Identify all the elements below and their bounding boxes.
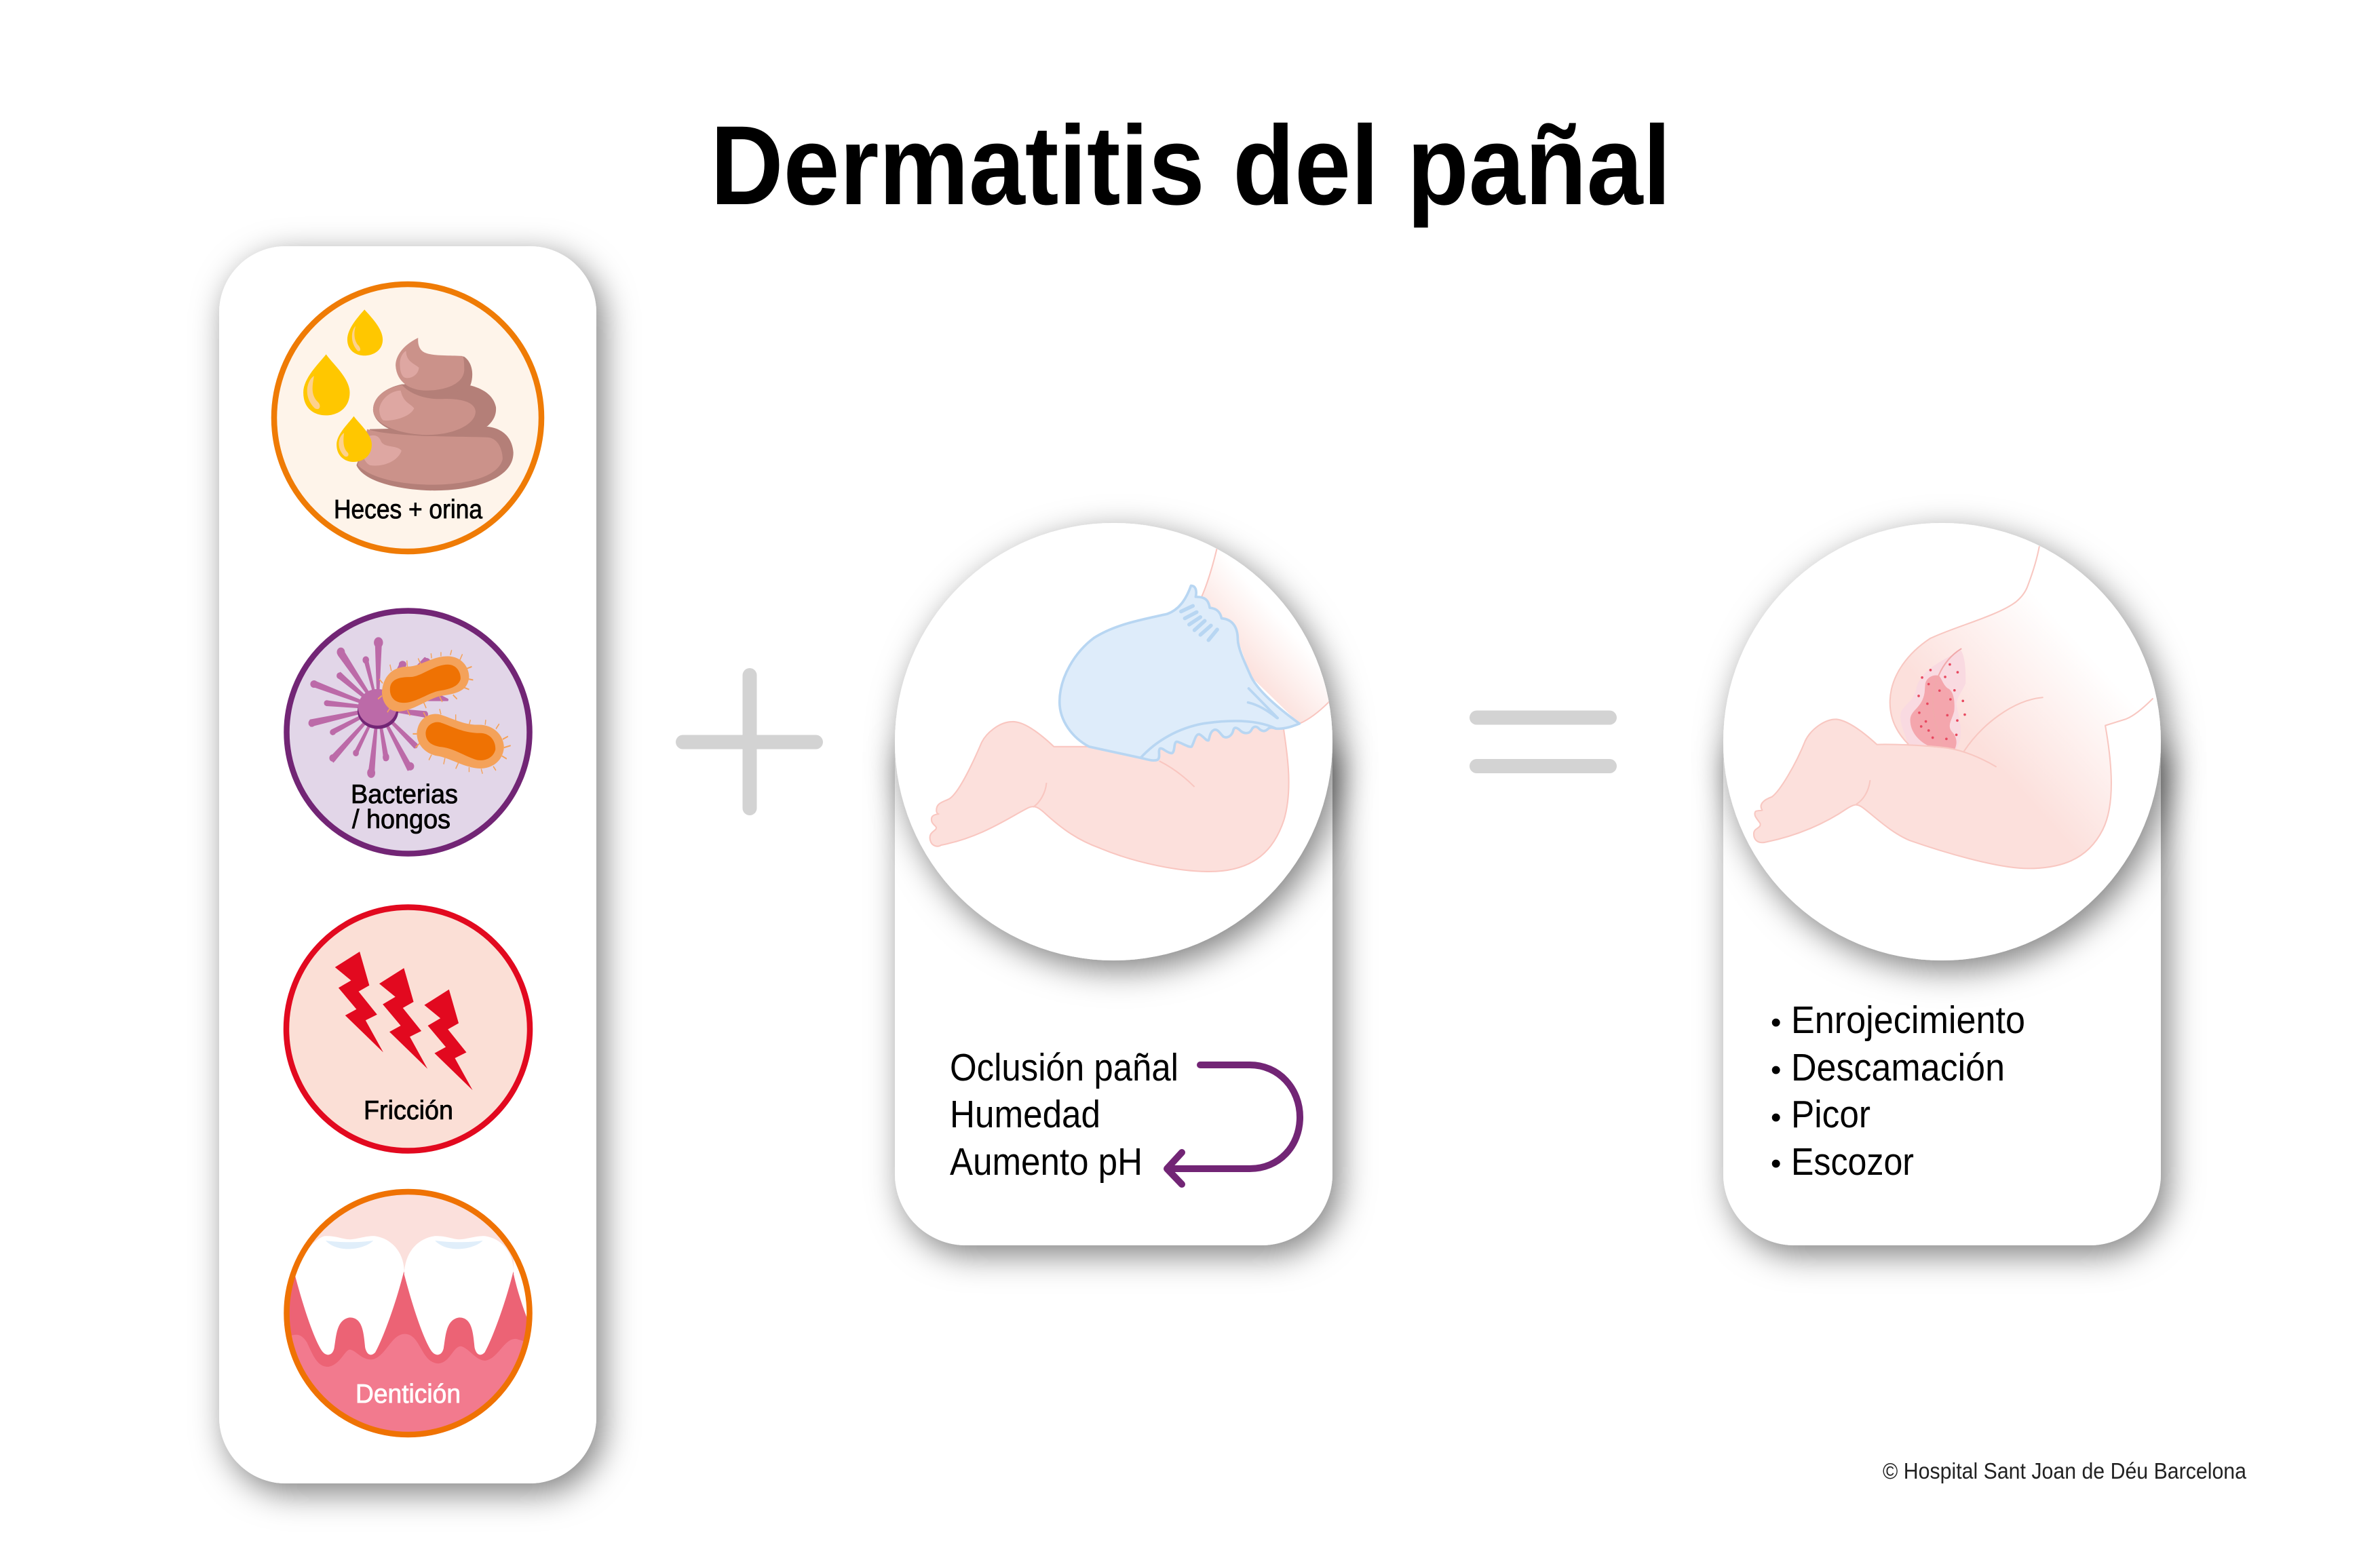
circle badge bbox=[286, 908, 530, 1150]
text: symptoms list bbox=[1771, 998, 2025, 1184]
label: Fricción bbox=[364, 1096, 453, 1125]
text: diaper factors: Humedad bbox=[950, 1093, 1100, 1136]
arrow: cycle bbox=[1167, 1065, 1300, 1184]
circle badge bbox=[286, 610, 529, 853]
label: Bacterias bbox=[351, 780, 458, 809]
label bbox=[351, 780, 458, 834]
text: symptoms list: Escozor bbox=[1791, 1140, 1914, 1184]
card background bbox=[1723, 742, 2161, 1245]
panel: diaper bbox=[895, 523, 1349, 1245]
circle background bbox=[895, 523, 1332, 960]
plus sign bbox=[676, 668, 823, 815]
title: Dermatitis del pañal bbox=[710, 103, 1671, 229]
text: symptoms list: • bbox=[1771, 1006, 1781, 1039]
text: symptoms list: Descamación bbox=[1791, 1046, 2005, 1089]
illustration: baby with rash bbox=[1754, 540, 2184, 868]
label: / hongos bbox=[352, 805, 450, 834]
panel: symptoms bbox=[1723, 523, 2184, 1245]
text: symptoms list: • bbox=[1771, 1101, 1781, 1134]
label: Heces + orina bbox=[334, 495, 482, 524]
copyright: © Hospital Sant Joan de Déu Barcelona bbox=[1883, 1458, 2247, 1483]
panel: causes bbox=[219, 246, 596, 1483]
icon: friction bbox=[286, 908, 530, 1150]
equals sign bbox=[1470, 711, 1617, 773]
circle badge bbox=[274, 284, 541, 551]
text: symptoms list: Picor bbox=[1791, 1093, 1870, 1136]
icon: stool and urine bbox=[274, 284, 541, 551]
text: symptoms list: • bbox=[1771, 1147, 1781, 1180]
text: symptoms list: • bbox=[1771, 1053, 1781, 1087]
text: diaper factors bbox=[950, 1046, 1178, 1184]
illustration: stool with drops bbox=[303, 309, 514, 490]
icon: bacteria and fungi bbox=[286, 610, 529, 853]
panel background bbox=[219, 246, 596, 1483]
label: Dentición bbox=[356, 1380, 461, 1409]
icon: teething bbox=[284, 1188, 533, 1438]
illustration: fungus and bacteria bbox=[309, 638, 511, 777]
illustration: lightning bolts bbox=[335, 952, 473, 1090]
text: symptoms list: Enrojecimiento bbox=[1791, 998, 2025, 1042]
text: diaper factors: Oclusión pañal bbox=[950, 1046, 1178, 1089]
illustration: teeth and gums bbox=[284, 1194, 532, 1437]
circle background bbox=[1723, 523, 2161, 960]
card background bbox=[895, 742, 1332, 1245]
circle border bbox=[286, 1192, 529, 1435]
illustration: baby leg with diaper bbox=[930, 540, 1349, 872]
text: diaper factors: Aumento pH bbox=[950, 1140, 1143, 1184]
